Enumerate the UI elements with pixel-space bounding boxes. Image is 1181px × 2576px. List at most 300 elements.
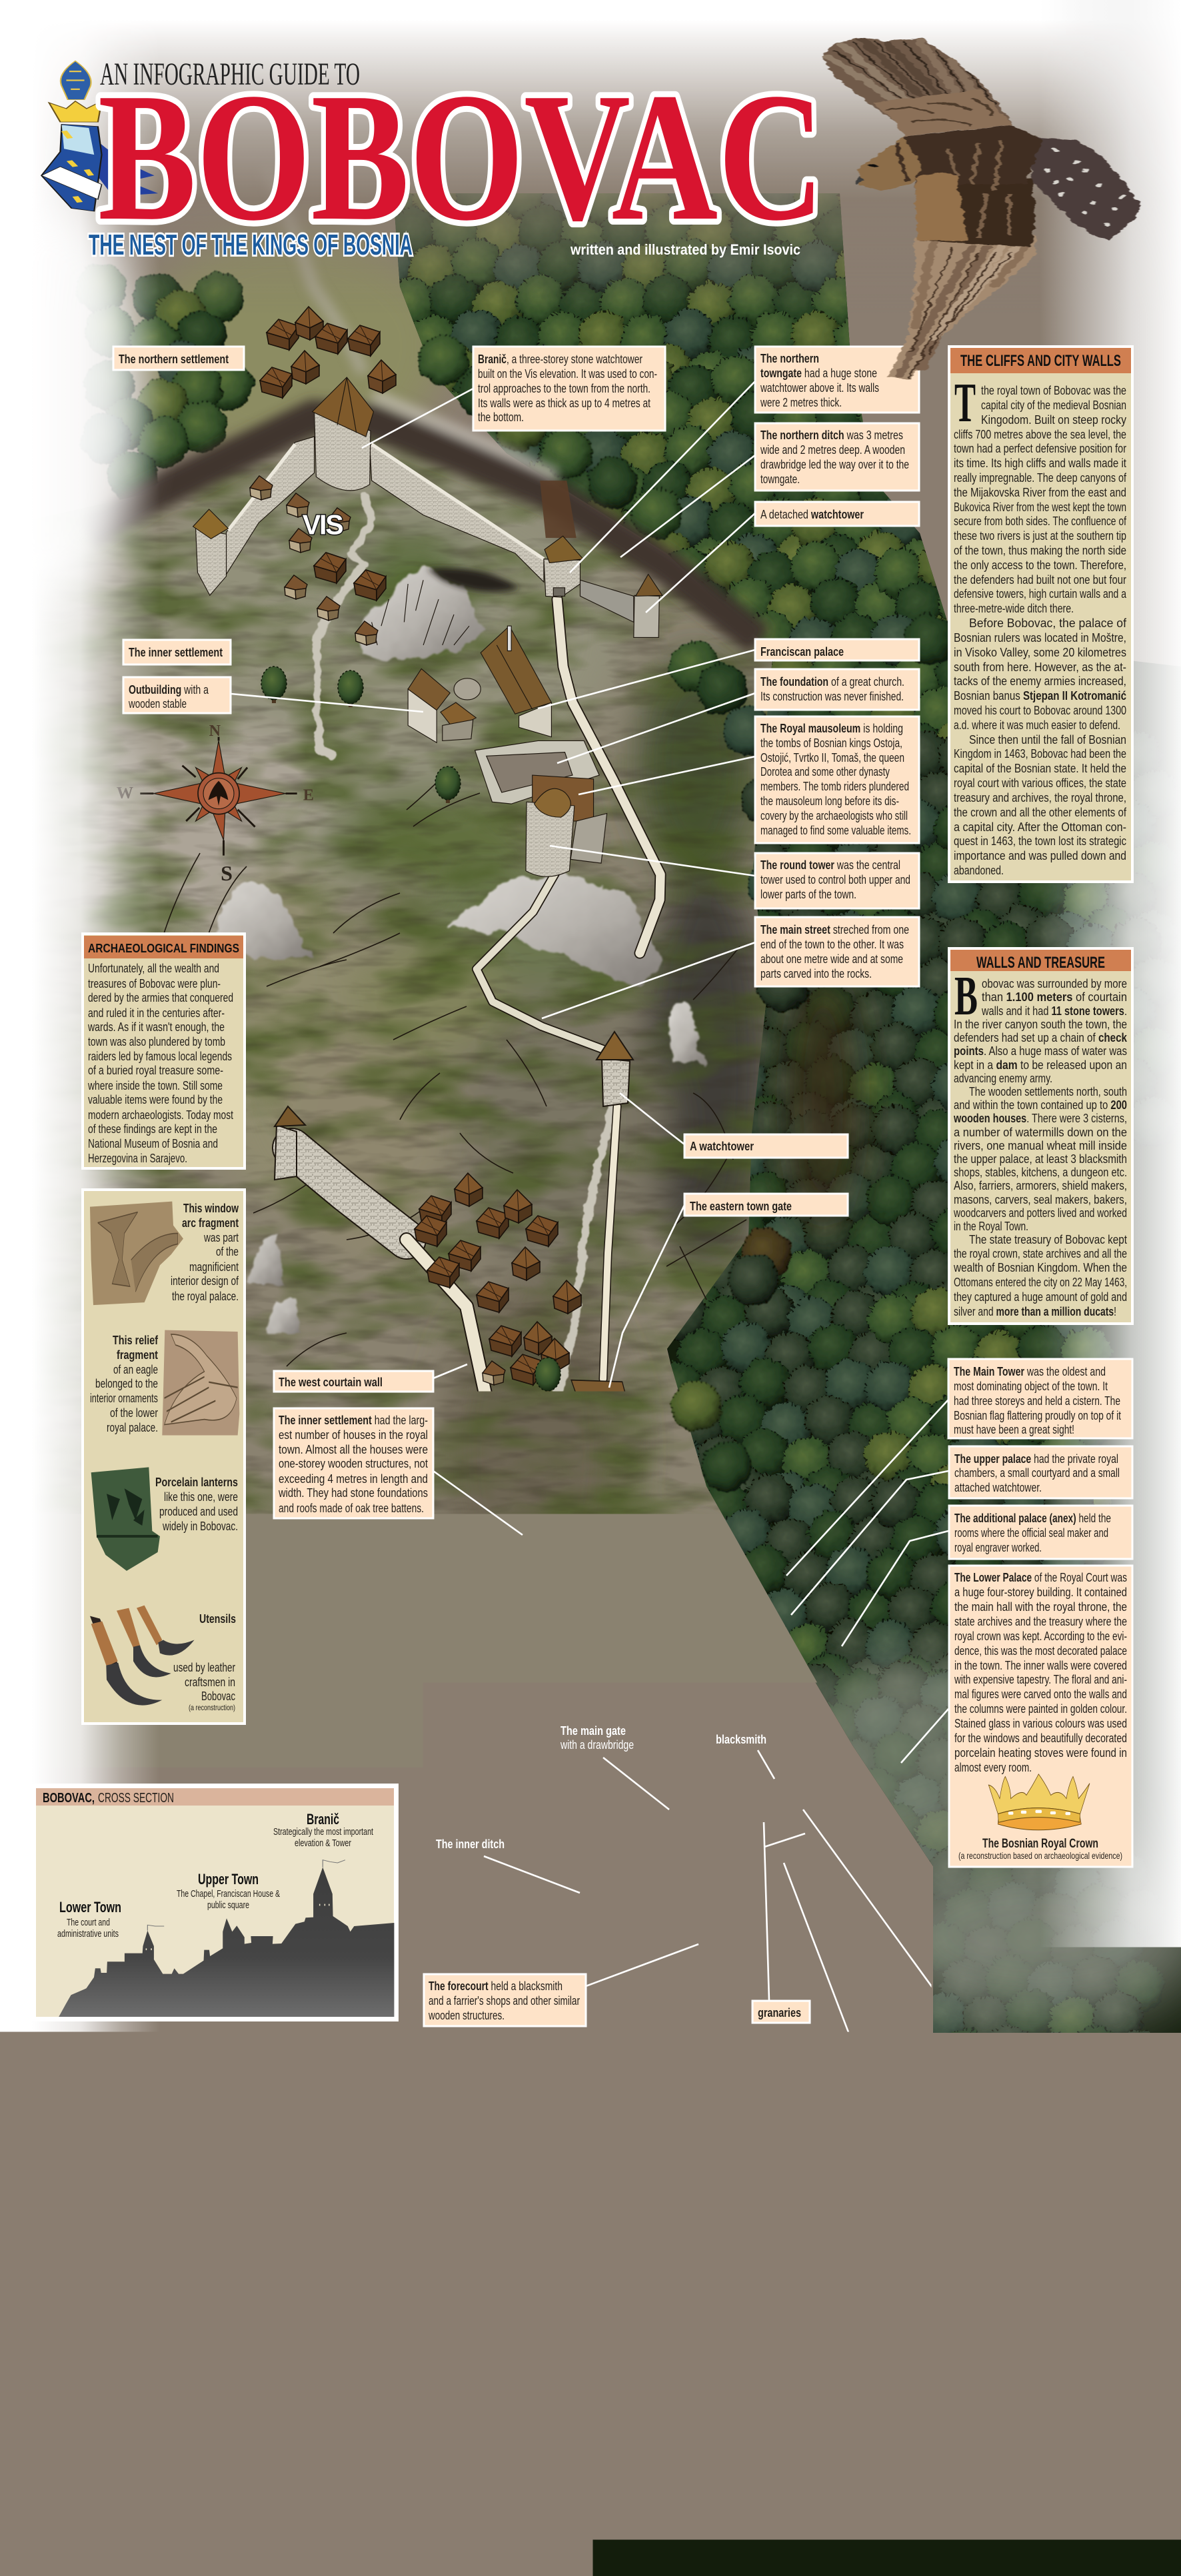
southern manor building [611,2319,744,2403]
northern towngate tower [544,536,583,597]
map label: a watchtower: A watchtower [690,1140,754,1153]
map label: main courtyard: shop and a roofed cistern. A staircase [948,1993,1102,2007]
article text: and within the town contained up to 200 [954,1098,1127,1112]
text: relief fragment: of an eagle [113,1363,158,1376]
map place names: Višegrad [427,2175,449,2181]
map label: royal mausoleum: covery by the archaeologists who still [760,809,908,822]
round tower [526,788,575,876]
panel: finds gallery [83,1190,245,1724]
text: relief fragment: belonged to the [95,1377,158,1390]
article text: walls and it had 11 stone towers. [981,1004,1127,1018]
courtiers text: at the Royal Court. [950,2377,1024,2391]
compass rose: E [303,786,314,804]
courtiers text [950,2349,1042,2521]
map label: Branič: Its walls were as thick as up to 4 metres at [478,397,650,410]
map label: lower palace with crown: for the windows and beautifully decorated [954,1732,1127,1745]
heading: The Lower Palace Portal [951,2047,1062,2061]
findings text: Unfortunately, all the wealth and [88,962,219,975]
article text: defensive towers, high curtain walls and a [954,587,1127,601]
courtiers text: Many of the courtiers [950,2349,1036,2362]
article text: wealth of Bosnian Kingdom. When the [953,1261,1127,1274]
large rock [372,580,469,645]
map place names: Mostar [335,2224,357,2231]
heading: WALLS AND TREASURE [976,954,1105,972]
map label: royal mausoleum: the mausoleum long before its dis- [760,794,899,808]
article text: advancing enemy army. [954,1072,1052,1085]
findings text: National Museum of Bosnia and [88,1137,218,1150]
text: utensils: used by leather [173,1661,235,1674]
accommodation text: kilometre away from the Royal Town in a magnificient natural environment and [39,2481,375,2495]
map label: northern towngate: watchtower above it. Its walls [760,381,879,395]
route map [34,2203,335,2437]
main gate, forecourt and south watchtower [533,1786,816,2233]
map label: inner settlement description: and roofs made of oak tree battens. [279,1502,424,1515]
route town names: Zenica [93,2207,161,2235]
route town names: Kraljeva [162,2257,189,2267]
map label: foundation of a church: The foundation of a great church. [760,675,904,688]
article text: masons, carvers, seal makers, bakers, [954,1193,1127,1206]
text: window fragment: interior design of [171,1274,239,1288]
article text: secure from both sides. The confluence of [954,515,1127,528]
findings text: valuable items were found by the [88,1093,223,1106]
map label: southern settlement: settlement [536,2310,584,2323]
wall from the eastern gate to the main tower [594,1439,705,1574]
stone wall strip in the south [760,2137,776,2233]
leader lines [231,381,948,2131]
heading: BOBOVAC, [43,1791,95,1806]
title block [89,55,824,261]
map label: round tower: The round tower was the central [760,858,900,872]
northern settlement houses [260,307,396,398]
text: relief fragment: fragment [117,1348,158,1362]
map label: southern settlement: Southern [539,2295,581,2309]
compass rose: W [117,784,133,802]
map label: upper palace: chambers, a small courtyard and a small [954,1466,1120,1480]
findings text: of these findings are kept in the [88,1122,217,1136]
image: porcelain lantern [91,1467,160,1571]
heading: CROSS SECTION [98,1791,174,1806]
map label: southern watchtower: the south. [805,2167,845,2180]
map label: main tower: The Main Tower was the oldest and [954,1365,1106,1378]
map label: the main gate [560,1724,634,1752]
map label: lower palace with crown [949,1566,1132,1867]
panel: how to get there and where to stay [30,2035,471,2536]
label: Branič: Strategically the most important [273,1826,374,1838]
Franciscan palace [481,626,551,737]
text: porcelain lanterns: produced and used [159,1505,238,1518]
map label: forecourt: and a farrier's shops and other similar [429,1994,580,2007]
heading: ARCHAEOLOGICAL FINDINGS [88,942,239,955]
map label: main street: The main street streched from one [760,923,909,936]
map label: northern settlement [113,347,244,370]
article text: B [954,965,978,1027]
map label: main tower: had three storeys and held a cistern. The [954,1394,1120,1408]
figure caption: a court duke [1054,2505,1111,2519]
directions text: since no public transportation is available. [39,2184,219,2199]
heading: how to get there: HOW TO GET THERE? [44,2057,167,2077]
heading [36,1788,394,1806]
map label: northern ditch: towngate. [760,473,800,486]
findings text: wards. As if it wasn't enough, the [87,1020,225,1034]
text: window fragment: This window [183,1202,239,1215]
map label: main courtyard: carved into the cliff led to this courtyard. [948,2008,1112,2021]
map place names: Livno [277,2168,295,2175]
credits text: Korijeni Bosne i Bosanstva, Sarajevo 1995, Pavao Anđelić: Bobovac i Kraljeva Sutjeska, Sarajevo 1973, An- [512,2463,918,2476]
map label: northern ditch: wide and 2 metres deep. A wooden [760,443,905,457]
body [904,125,1043,247]
roads and paths [292,497,660,2226]
accommodation text: providing a genuine Bosnian cousine, your vacation there will be an unforgettable [39,2495,378,2509]
map label: granaries [752,2001,810,2023]
map label: forecourt [424,1974,586,2026]
roofed cistern and granaries [743,1789,868,1848]
courtiers text: cooks, horsekeepers, [950,2479,1036,2493]
article text: tacks of the enemy armies increased, [954,674,1126,688]
wall to the detached tower [580,580,634,622]
heading [950,950,1131,972]
text: porcelain lanterns: Porcelain lanterns [155,1476,238,1489]
article text: silver and more than a million ducats! [954,1305,1116,1318]
forecourt with wooden structures [658,1861,739,1970]
map label: main courtyard [943,1973,1132,2023]
text: window fragment: arc fragment [182,1216,239,1230]
great church foundation [475,740,599,804]
panel: archaeological findings [83,934,245,1168]
findings text: and ruled it in the centuries after- [88,1006,225,1020]
crown caption: The Bosnian Royal Crown [982,1837,1098,1851]
map label: northern towngate: towngate had a huge stone [760,367,877,380]
map label: eastern town gate: The eastern town gate [690,1200,792,1213]
icon: court duke figure [1048,2327,1120,2503]
text: relief fragment: of the lower [110,1406,158,1420]
article text: T [954,372,976,434]
scale bar: 20 [111,2379,126,2394]
map label: detached watchtower: A detached watchtower [760,508,864,521]
map label: inner settlement description: town. Almost all the houses were [279,1443,428,1456]
map place names: Tuzla [403,2101,419,2109]
map label: northern ditch [755,423,919,491]
compass rose [117,722,314,885]
article text: the defenders had built not one but four [954,573,1126,587]
dark defensive ditch [87,167,760,641]
royal castle [666,1418,978,2019]
text: utensils: (a reconstruction) [189,1703,235,1712]
map label: Branič: trol approaches to the town from the north. [478,382,650,395]
article text [954,372,1127,877]
article text: town had a perfect defensive position for [954,442,1126,455]
map label: royal mausoleum: Dorotea and some other dynasty [760,765,890,778]
map label: inner ditch: The inner ditch [436,1838,505,1851]
map label: inner settlement description: exceeding 4 metres in length and [279,1472,428,1486]
label: Upper Town: public square [207,1900,249,1911]
courtiers text: carvers, maidens, [950,2465,1022,2478]
map label: west courtain wall [274,1371,433,1392]
article text: In the river canyon south the town, the [954,1018,1127,1031]
Bobovac castle sketch [187,2214,235,2252]
article text: the upper palace, at least 3 blacksmith [954,1152,1127,1166]
north-east wall of Vis [370,445,544,582]
route town names: Breza [236,2319,254,2330]
label: Branič [273,1811,374,1849]
courtiers text: These were the court [950,2392,1036,2405]
map label: inner settlement description: width. They had stone foundations [278,1486,428,1500]
southern settlement and manor [559,2199,913,2442]
map label: round tower [755,853,919,908]
article text: capital city of the medieval Bosnian [981,399,1126,412]
map label: west courtain wall: The west courtain wall [279,1376,383,1389]
royal mausoleum [533,775,607,863]
text: relief fragment: This relief [113,1334,159,1347]
map label: lower palace with crown: royal crown was kept. According to the evi- [954,1630,1127,1643]
article text: a.d. where it was much easier to defend. [954,718,1120,732]
lower wing feathers [888,235,1036,379]
text: relief fragment: royal palace. [107,1421,158,1434]
compass rose: N [209,722,221,740]
map label: outbuilding: wooden stable [128,697,187,710]
heading [946,2311,1130,2337]
terrain north of the ditch [140,227,447,467]
map place names: Brčko [413,2067,431,2074]
white limestone rocks [213,567,950,2442]
route town names: Sarajevo [247,2393,335,2421]
map label: northern ditch: drawbridge led the way over it to the [760,458,909,471]
map label: outbuilding: Outbuilding with a [129,683,209,696]
eastern town gate [571,1380,630,1454]
left guard [995,2124,1024,2221]
central settlement, walls and castle [246,1322,764,2155]
wooden houses of inner settlement [420,1322,594,1650]
QR code [424,2449,508,2532]
article text: moved his court to Bobovac around 1300 [954,704,1126,717]
wooden drawbridge [540,481,577,538]
article text: Bosnian banus Stjepan II Kotromanić [954,689,1126,702]
text: porcelain lanterns: like this one, were [164,1490,238,1504]
map label: forecourt: wooden structures. [428,2009,505,2022]
map label: northern towngate: were 2 metres thick. [760,396,842,409]
findings text: raiders led by famous local legends [88,1050,232,1063]
icon: Bosnian royal crown [988,1774,1090,1830]
article text: Before Bobovac, the palace of [969,617,1127,630]
upper town: Vis hill with Branič tower and walls [117,377,662,885]
map label: foundation of a church [755,669,919,710]
article text: Also, farriers, armorers, shield makers, [954,1179,1127,1192]
detached watchtower [634,575,662,637]
article text: kept in a dam to be released upon an [954,1058,1127,1072]
article text: woodcarvers and potters lived and worked [953,1206,1127,1220]
courtyard [728,1781,873,1850]
map label: upper palace: attached watchtower. [954,1481,1042,1494]
map label: lower palace with crown: (a reconstruction based on archaeological evidence) [958,1850,1122,1861]
map label: lower palace with crown: almost every room. [954,1761,1032,1774]
article text: three-metre-wide ditch there. [954,602,1074,615]
map label: main tower [948,1359,1132,1438]
label: Lower Town [57,1899,121,1939]
text: window fragment: was part [203,1231,239,1244]
map place names: Dubrovnik [344,2287,371,2293]
southern watchtower [662,1961,728,2065]
label: Upper Town: Upper Town [198,1871,259,1888]
article text [953,965,1128,1318]
relief map of Bosnia [189,2035,471,2303]
tagline: THE NEST OF THE KINGS OF BOSNIA [89,229,413,261]
eagle [822,37,1141,379]
map label: northern towngate: The northern [760,352,819,365]
map label: a watchtower [684,1134,848,1158]
panel: the lower palace portal [943,2039,1132,2275]
article text: wooden houses. There were 3 cisterns, [953,1112,1127,1125]
main gate tower [626,1786,714,1887]
scale bar: 10 [79,2379,93,2394]
article text: a capital city. After the Ottoman con- [954,820,1126,834]
article text: Kingdom in 1463, Bobovac had been the [954,747,1126,760]
inner settlement houses upper group [415,1173,581,1314]
article text: rivers, one manual wheat mill inside [954,1139,1127,1152]
text: utensils: craftsmen in [185,1676,235,1689]
artist signature: isovic=mir [817,2403,918,2440]
map place names: Visoko [347,2161,361,2165]
article text: Bosnian rulers was located in Moštre, [954,631,1126,644]
panel: the cliffs and city walls [949,347,1132,882]
heading: COURTIERS [950,2315,1001,2330]
map label: foundation of a church: Its construction was never finished. [760,690,904,703]
route town names: Sutjeska [162,2265,189,2275]
credits text: Written and published by Emir Isović, Sarajevo 2013. Printed in 500 copies. Literature used: Dr. Enver Imamović: [512,2449,918,2462]
label: Lower Town: administrative units [57,1928,119,1939]
flag on the main tower [688,1418,778,1474]
map place names: Travnik [317,2127,339,2134]
image: window arc fragment [90,1202,183,1305]
route town names: Visoko [137,2339,167,2351]
north-west tower [193,509,228,595]
map label: lower palace with crown: with expensive tapestry. The floral and ani- [954,1673,1127,1686]
map label: lower palace with crown: The Lower Palace of the Royal Court was [954,1571,1127,1584]
subtitle: an infographic guide: AN INFOGRAPHIC GUIDE TO [100,57,360,92]
map label: Branič: the bottom. [478,411,524,424]
small south-west tower [378,1634,414,1720]
text: porcelain lanterns: widely in Bobovac. [162,1520,238,1533]
thin contour lines [160,766,853,2439]
article text: the royal town of Bobovac was the [981,384,1126,397]
portal illustration [947,2063,1128,2271]
accommodation text: We cordially recommed you the Ibrisimovic Country Household. Located only one [39,2466,382,2480]
map label: inner settlement [123,640,231,664]
map label: northern settlement: The northern settlement [119,353,229,366]
map place names: Kakanj [348,2145,361,2149]
map place names: Jajce [299,2118,316,2125]
map place names: Bobovac [358,2132,383,2139]
map label: blacksmith: blacksmith [716,1733,766,1746]
article text: of the town, thus making the north side [954,544,1126,557]
text: utensils: Bobovac [201,1690,235,1703]
small wooden houses [250,476,461,803]
image: leather craft utensils [90,1606,195,1706]
article text: Bukovica River from the west kept the town [954,501,1126,514]
map label: royal mausoleum [755,716,919,843]
wing coverts [874,89,1013,137]
map label: lower palace with crown: the main hall with the royal throne, the [954,1600,1127,1614]
map label: lower palace with crown: in the town. The inner walls were covered [954,1659,1127,1672]
heading [84,936,243,958]
map label: outbuilding [123,677,231,713]
directions text: except some ten kilometres of [39,2151,180,2165]
map place names: Jablanica [322,2200,343,2205]
scale bar: 30 [145,2379,159,2394]
west tower with wall start [275,1106,305,1180]
findings text [87,962,233,1165]
article text: capital of the Bosnian state. It held the [954,762,1126,775]
map label: northern ditch: The northern ditch was 3 metres [760,429,903,442]
panel: cross section [32,1784,399,2021]
upper wing [822,37,1013,125]
map label: inner settlement description: The inner settlement had the larg- [279,1414,428,1427]
findings text: of a buried royal treasure some- [88,1064,223,1077]
article text: The wooden settlements north, south [969,1085,1127,1098]
VIS elevation label: VIS [303,509,344,540]
credits text: You can order a signed copy of this poster on www.bosniankingdom.com. Distributed by Association Čuvari [512,2503,918,2516]
article text: the royal crown, state archives and all the [954,1247,1127,1260]
map label: inner settlement description [274,1408,433,1518]
main tower [694,1474,804,1648]
findings text: town was also plundered by tomb [88,1035,225,1048]
directions text: Kakanj and Kraljeva Sutjeska or [39,2101,186,2115]
article text: the crown and all the other elements of [954,806,1127,819]
article text: Kingodom. Built on steep rocky [981,413,1126,427]
article text: these two rivers is just at the southern tip [954,529,1126,543]
map place names: Bihać [197,2068,209,2074]
text: window fragment [171,1202,239,1303]
article text: The state treasury of Bobovac kept [969,1233,1127,1246]
article text: shops, stables, kitchens, a dungeon etc. [954,1166,1127,1179]
article text: in the Royal Town. [954,1220,1028,1233]
label: Branič: elevation & Tower [295,1838,351,1849]
directions text: You can travel to Bobovac via [39,2084,177,2099]
head [856,137,922,191]
accommodation text: one. For information call +387 62 259 188 or visit www.cuvariboskrune.org [39,2510,363,2524]
route town names: Bobovac [167,2233,206,2246]
map label: inner settlement description: one-storey wooden structures, not [279,1457,428,1470]
extra forest edge trees [418,335,682,539]
map label: main street: end of the town to the other. It was [760,938,904,951]
map label: additional palace [949,1506,1132,1559]
author line: written and illustrated by Emir Isovic [570,241,800,258]
map place names [197,2067,449,2293]
directions text: via Breza and Vareš. Take the easy [39,2117,203,2132]
text: relief fragment: interior ornaments [90,1392,158,1405]
heading [950,348,1131,373]
accommodation text [39,2466,382,2524]
map label: lower palace with crown: state archives and the treasury where the [954,1615,1127,1628]
text: porcelain lanterns [155,1476,238,1533]
article text: the Mijakovska River from the east and [954,486,1126,499]
map label: the main gate: The main gate [561,1724,626,1738]
scale bar [49,2379,159,2423]
outbuilding with wooden stable [408,668,481,742]
article text: quest in 1463, the town lost its strategic [954,834,1126,848]
article text: Since then until the fall of Bosnian [969,733,1126,746]
map label: main street: parts carved into the rocks. [760,967,872,980]
panel: courtiers [942,2307,1134,2537]
courtiers text: treasurer, knights, [950,2436,1024,2449]
text: window fragment: magnificient [189,1260,239,1274]
map label: inner settlement description: est number of houses in the royal [279,1428,428,1442]
map label: main tower: most dominating object of the town. It [954,1380,1108,1393]
route town names: Ilidža [201,2427,219,2437]
courtiers text: oxen keepers and [950,2494,1022,2507]
map label: lower palace with crown: a huge four-storey building. It contained [954,1586,1127,1599]
map label: southern settlement [519,2289,602,2329]
article text: they captured a huge amount of gold and [954,1290,1127,1304]
west wall of Vis [227,437,315,575]
